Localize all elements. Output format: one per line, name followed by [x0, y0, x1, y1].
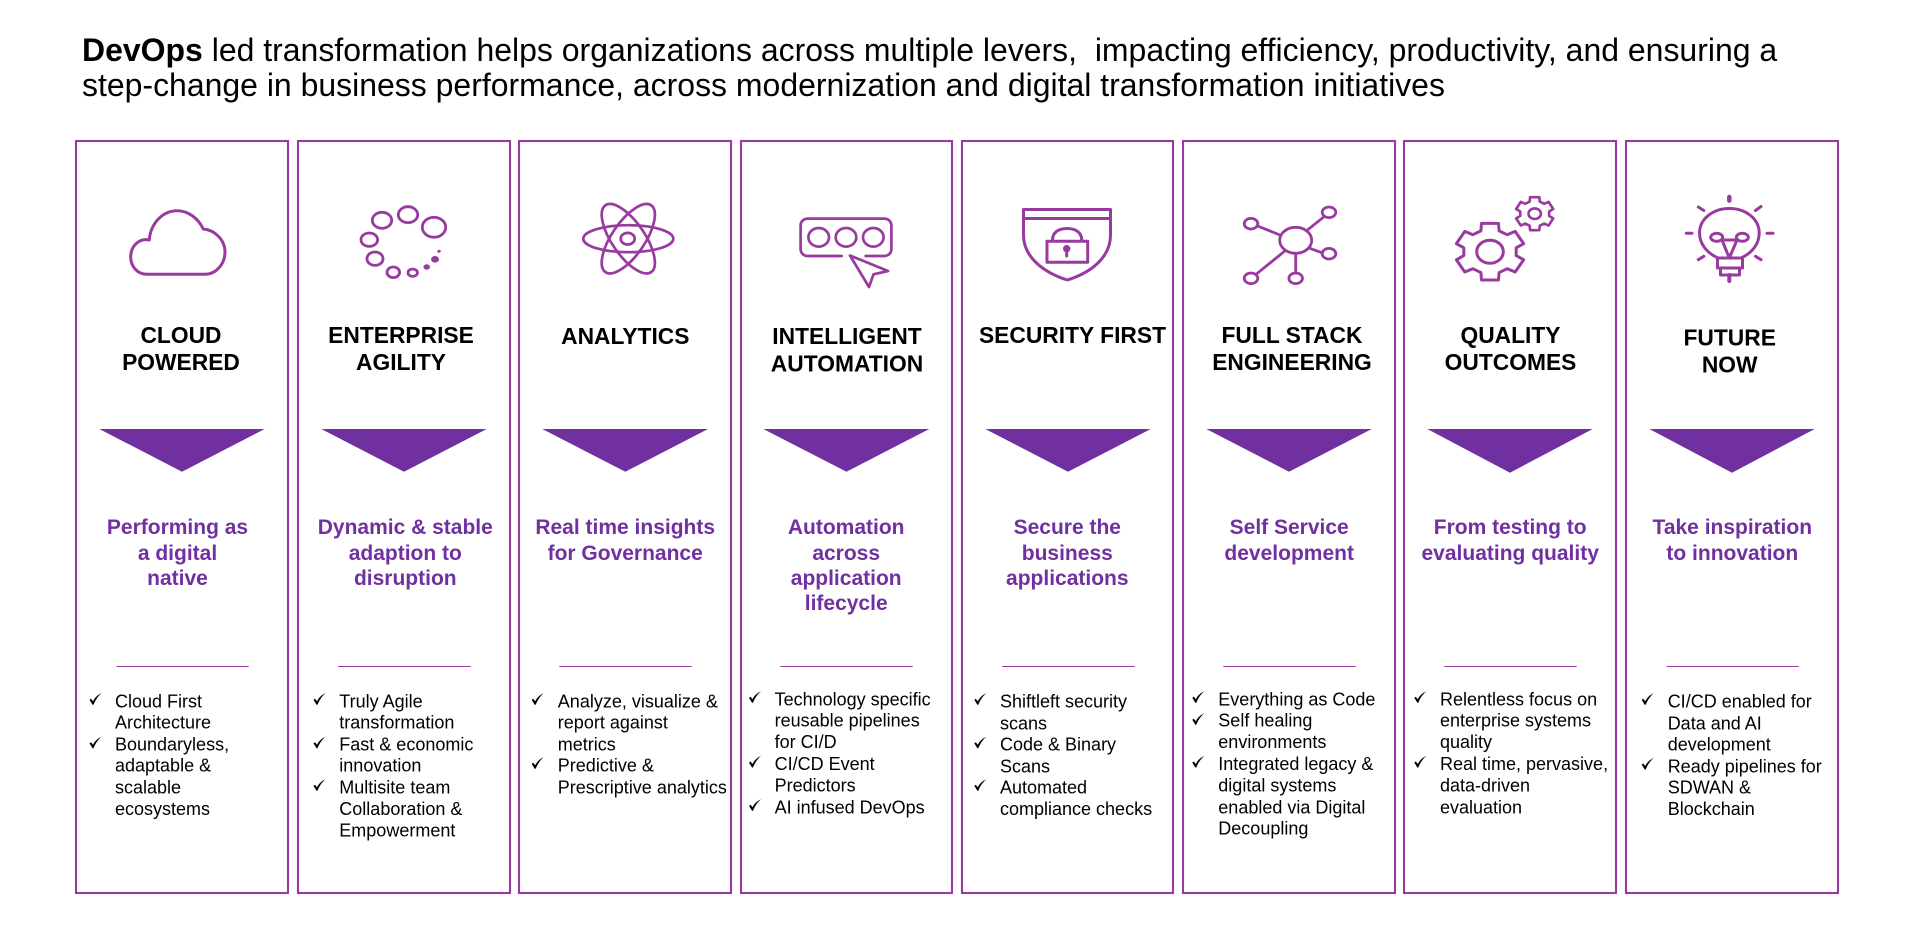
bullet list: Technology specific: [775, 689, 931, 709]
bullet list: Fast & economic: [339, 735, 473, 755]
bullet list: [532, 691, 727, 797]
bullet list: Empowerment: [339, 821, 455, 841]
bullet list: scalable: [115, 777, 181, 797]
subheading: application: [791, 567, 902, 590]
bullet list: Data and AI: [1668, 713, 1762, 733]
subheading: [318, 516, 493, 590]
bullet list: reusable pipelines: [775, 711, 920, 731]
bullet list: development: [1668, 735, 1771, 755]
heading: future now: FUTURE: [1683, 324, 1776, 350]
bullet list: evaluation: [1440, 797, 1522, 817]
bullet list: [749, 689, 931, 817]
bullet list: Prescriptive analytics: [558, 777, 727, 797]
bullet list: [314, 691, 473, 841]
panel: security first: [962, 141, 1173, 893]
subheading: [788, 516, 905, 615]
subheading: lifecycle: [805, 592, 888, 615]
bullet list: Architecture: [115, 712, 211, 732]
bullet list: digital systems: [1218, 775, 1336, 795]
subheading: Performing as: [107, 516, 248, 539]
bullet list: Decoupling: [1218, 818, 1308, 838]
heading: future now: [1683, 324, 1776, 377]
heading: analytics: ANALYTICS: [561, 323, 689, 349]
panel: cloud powered: [76, 141, 288, 893]
bullet list: Automated: [1000, 777, 1087, 797]
subheading: [1006, 516, 1129, 590]
bullet list: [1414, 689, 1608, 817]
subheading: [1224, 516, 1354, 565]
bullet list: Real time, pervasive,: [1440, 754, 1608, 774]
heading: full stack engineering: FULL STACK: [1222, 322, 1363, 348]
heading: intelligent automation: [771, 323, 923, 377]
icon: loading circles: [361, 207, 446, 278]
heading: enterprise agility: [328, 322, 474, 375]
bullet list: Ready pipelines for: [1668, 756, 1822, 776]
subheading: development: [1224, 542, 1354, 565]
arrow: down triangle: [321, 429, 487, 472]
subheading: adaption to: [349, 542, 462, 565]
bullet list: compliance checks: [1000, 799, 1152, 819]
heading: quality outcomes: [1445, 322, 1576, 375]
subheading: [1653, 516, 1812, 565]
subheading: native: [147, 567, 208, 590]
arrow: down triangle: [1427, 429, 1593, 473]
subheading: Dynamic & stable: [318, 516, 493, 539]
subheading: Take inspiration: [1653, 516, 1812, 539]
bullet list: ecosystems: [115, 799, 210, 819]
panel: full stack engineering: [1183, 141, 1395, 893]
subheading: business: [1022, 542, 1113, 565]
subheading: for Governance: [548, 542, 703, 565]
bullet list: Boundaryless,: [115, 735, 229, 755]
arrow: down triangle: [763, 429, 929, 472]
heading: full stack engineering: [1212, 322, 1372, 375]
bullet list: transformation: [339, 712, 454, 732]
heading: cloud powered: POWERED: [122, 349, 240, 375]
title: [82, 32, 1777, 103]
icon: cloud: [131, 211, 225, 274]
subheading: Self Service: [1230, 516, 1349, 539]
arrow: down triangle: [542, 429, 708, 472]
heading: quality outcomes: QUALITY: [1460, 322, 1561, 348]
subheading: [535, 516, 715, 565]
heading: quality outcomes: OUTCOMES: [1445, 349, 1576, 375]
subheading: Real time insights: [535, 516, 715, 539]
icon: gears: [1456, 197, 1553, 280]
bullet list: Blockchain: [1668, 799, 1755, 819]
subheading: to innovation: [1666, 542, 1798, 565]
bullet list: Truly Agile: [339, 691, 423, 711]
bullet list: [1192, 689, 1375, 838]
icon: dialog with cursor: [801, 219, 891, 287]
subheading: [107, 516, 248, 590]
arrow: down triangle: [1206, 429, 1372, 472]
bullet list: adaptable &: [115, 756, 211, 776]
icon: shield with lock: [1024, 210, 1110, 280]
subheading: applications: [1006, 567, 1129, 590]
heading: enterprise agility: AGILITY: [356, 349, 446, 375]
arrow: down triangle: [1649, 429, 1815, 473]
bullet list: for CI/D: [775, 732, 837, 752]
subheading: [1422, 516, 1599, 565]
bullet list: Collaboration &: [339, 799, 462, 819]
subheading: disruption: [354, 567, 457, 590]
heading: enterprise agility: ENTERPRISE: [328, 322, 474, 348]
heading: intelligent automation: AUTOMATION: [771, 351, 923, 377]
bullet list: data-driven: [1440, 775, 1530, 795]
panel: analytics: [519, 141, 731, 893]
bullet list: Scans: [1000, 756, 1050, 776]
bullet list: quality: [1440, 732, 1492, 752]
heading: future now: NOW: [1702, 351, 1758, 377]
subheading: evaluating quality: [1422, 542, 1599, 565]
bullet list: metrics: [558, 735, 616, 755]
bullet list: Everything as Code: [1218, 689, 1375, 709]
bullet list: [90, 691, 229, 819]
icon: atom: [583, 196, 673, 281]
bullet list: scans: [1000, 713, 1047, 733]
title: step-change in business performance, across modernization and digital transformation initiatives: [82, 67, 1445, 103]
bullet list: Shiftleft security: [1000, 691, 1127, 711]
bullet list: enabled via Digital: [1218, 797, 1365, 817]
bullet list: Integrated legacy &: [1218, 754, 1373, 774]
heading: intelligent automation: INTELLIGENT: [772, 323, 922, 349]
subheading: From testing to: [1434, 516, 1587, 539]
bullet list: innovation: [339, 756, 421, 776]
bullet list: [974, 691, 1152, 819]
bullet list: Code & Binary: [1000, 735, 1116, 755]
heading: full stack engineering: ENGINEERING: [1212, 349, 1372, 375]
panel: quality outcomes: [1404, 141, 1616, 893]
bullet list: Multisite team: [339, 777, 450, 797]
bullet list: environments: [1218, 732, 1326, 752]
bullet list: Predictive &: [558, 756, 654, 776]
bullet list: report against: [558, 712, 668, 732]
subheading: a digital: [138, 542, 217, 565]
bullet list: enterprise systems: [1440, 711, 1591, 731]
heading: cloud powered: CLOUD: [140, 322, 222, 348]
arrow: down triangle: [99, 429, 265, 472]
bullet list: [1642, 691, 1822, 819]
bullet list: Analyze, visualize &: [558, 691, 718, 711]
bullet list: AI infused DevOps: [775, 797, 925, 817]
bullet list: SDWAN &: [1668, 777, 1751, 797]
panel: enterprise agility: [298, 141, 510, 893]
heading: cloud powered: [122, 322, 240, 375]
subheading: across: [812, 542, 880, 565]
bullet list: CI/CD Event: [775, 754, 875, 774]
panel: future now: [1626, 141, 1838, 893]
bullet list: Cloud First: [115, 691, 202, 711]
bullet list: CI/CD enabled for: [1668, 691, 1812, 711]
icon: light bulb: [1686, 197, 1773, 281]
panel: intelligent automation: [741, 141, 952, 893]
bullet list: Self healing: [1218, 711, 1312, 731]
heading: security first: SECURITY FIRST: [979, 322, 1166, 348]
bullet list: Predictors: [775, 775, 856, 795]
subheading: Secure the: [1014, 516, 1121, 539]
icon: network: [1244, 207, 1336, 284]
title: DevOps led transformation helps organizations across multiple levers, impacting efficiency, productivity, and ensuring a: [82, 32, 1777, 68]
subheading: Automation: [788, 516, 905, 539]
bullet list: Relentless focus on: [1440, 689, 1597, 709]
arrow: down triangle: [985, 429, 1151, 472]
